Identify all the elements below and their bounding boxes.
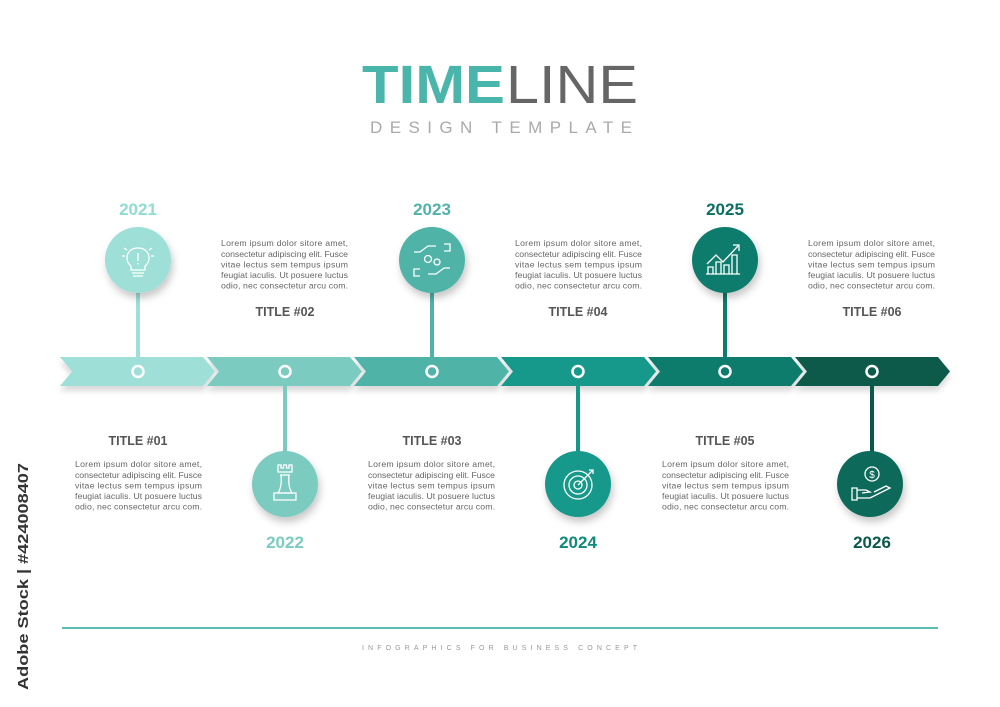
text block: title 04: consectetur adipiscing elit. Fusce: [515, 249, 642, 259]
text block: title 02: vitae lectus sem tempus ipsum: [221, 260, 348, 270]
milestone 2026: 2026: [853, 533, 891, 552]
icon: lightbulb: [122, 248, 154, 276]
text block: title 03: consectetur adipiscing elit. Fusce: [368, 470, 495, 480]
footer text: INFOGRAPHICS FOR BUSINESS CONCEPT: [362, 645, 638, 652]
text block: title 05: TITLE #05: [695, 434, 755, 448]
text block: title 06: feugiat iaculis. Ut posuere luctus: [808, 270, 936, 280]
milestone 2022: [252, 366, 318, 552]
icon: chess rook: [274, 465, 296, 500]
icon: hand with coin: [852, 467, 890, 500]
text block: title 03: vitae lectus sem tempus ipsum: [368, 480, 495, 490]
text block: title 03: TITLE #03: [402, 434, 462, 448]
text block: title 01: [75, 434, 203, 512]
text block: title 03: Lorem ipsum dolor sitore amet,: [368, 459, 495, 469]
text block: title 05: Lorem ipsum dolor sitore amet,: [662, 459, 789, 469]
milestone 2021: 2021: [119, 200, 157, 219]
text block: title 04: feugiat iaculis. Ut posuere luctus: [515, 270, 643, 280]
text block: title 05: vitae lectus sem tempus ipsum: [662, 480, 789, 490]
text block: title 02: Lorem ipsum dolor sitore amet,: [221, 238, 348, 248]
text block: title 06: TITLE #06: [842, 305, 902, 319]
milestone 2024: 2024: [559, 533, 597, 552]
text block: title 05: odio, nec consectetur arcu com.: [662, 502, 789, 512]
subtitle: DESIGN TEMPLATE: [370, 118, 632, 137]
milestone 2024: [545, 366, 611, 552]
title: [362, 55, 638, 115]
text block: title 01: TITLE #01: [108, 434, 168, 448]
text block: title 06: odio, nec consectetur arcu com.: [808, 280, 935, 290]
milestone 2023: [399, 200, 465, 377]
milestone 2022: 2022: [266, 533, 304, 552]
text block: title 02: odio, nec consectetur arcu com.: [221, 280, 348, 290]
text block: title 01: odio, nec consectetur arcu com.: [75, 502, 202, 512]
text block: title 06: consectetur adipiscing elit. Fusce: [808, 249, 935, 259]
text block: title 04: TITLE #04: [548, 305, 608, 319]
text block: title 04: [515, 238, 643, 319]
title: TIME: [362, 55, 505, 115]
icon: target: [564, 470, 593, 499]
icon: hand with coin: $: [869, 470, 875, 481]
milestone 2023: 2023: [413, 200, 451, 219]
icon: growth chart: [706, 245, 740, 274]
icon: hands with gears: [414, 244, 450, 276]
text block: title 02: [221, 238, 349, 319]
text block: title 06: vitae lectus sem tempus ipsum: [808, 260, 935, 270]
text block: title 01: feugiat iaculis. Ut posuere luctus: [75, 491, 203, 501]
text block: title 03: [368, 434, 496, 512]
milestone 2025: [692, 200, 758, 377]
milestone 2025: 2025: [706, 200, 744, 219]
text block: title 06: Lorem ipsum dolor sitore amet,: [808, 238, 935, 248]
text block: title 05: consectetur adipiscing elit. Fusce: [662, 470, 789, 480]
text block: title 02: TITLE #02: [255, 305, 315, 319]
text block: title 05: [662, 434, 790, 512]
text block: title 02: feugiat iaculis. Ut posuere luctus: [221, 270, 349, 280]
text block: title 03: odio, nec consectetur arcu com.: [368, 502, 495, 512]
text block: title 04: Lorem ipsum dolor sitore amet,: [515, 238, 642, 248]
text block: title 02: consectetur adipiscing elit. Fusce: [221, 249, 348, 259]
text block: title 01: consectetur adipiscing elit. Fusce: [75, 470, 202, 480]
text block: title 03: feugiat iaculis. Ut posuere luctus: [368, 491, 496, 501]
text block: title 01: Lorem ipsum dolor sitore amet,: [75, 459, 202, 469]
timeline band: [60, 357, 950, 386]
text block: title 05: feugiat iaculis. Ut posuere luctus: [662, 491, 790, 501]
milestone 2021: [105, 200, 171, 377]
text block: title 04: vitae lectus sem tempus ipsum: [515, 260, 642, 270]
text block: title 01: vitae lectus sem tempus ipsum: [75, 480, 202, 490]
title: LINE: [506, 55, 638, 115]
text block: title 06: [808, 238, 936, 319]
side watermark text: Adobe Stock | #424008407: [15, 463, 32, 690]
milestone 2026: [837, 366, 903, 552]
text block: title 04: odio, nec consectetur arcu com.: [515, 280, 642, 290]
